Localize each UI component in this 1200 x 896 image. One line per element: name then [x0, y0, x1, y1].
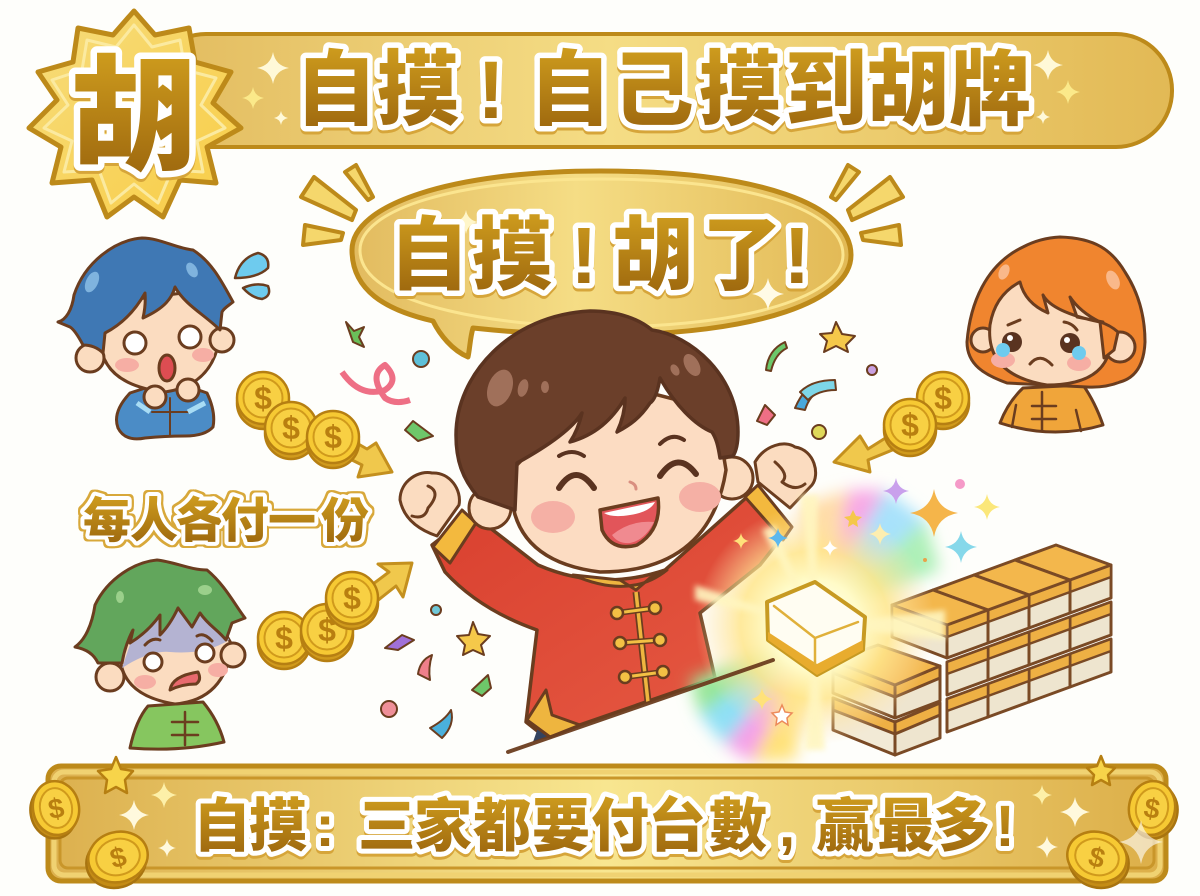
coins and arrow: green boy pays [258, 563, 412, 669]
character: blue boy surprised [58, 238, 234, 439]
blue boy eyes [124, 332, 146, 354]
boy leg [533, 722, 558, 742]
title banner [150, 34, 1172, 147]
corner star left [98, 757, 133, 793]
label: each pays one share: 每人各付一份 [83, 495, 369, 548]
girl tears and blush [991, 352, 1015, 368]
boy cuffs [433, 485, 792, 563]
girl right side lock [1100, 322, 1118, 358]
burst rays [301, 165, 903, 245]
green boy mouth [170, 672, 200, 690]
girl face [990, 282, 1107, 385]
confetti [342, 322, 877, 738]
glow sparkles [733, 478, 1000, 725]
character: main boy celebrating [400, 311, 816, 742]
title text: 自摸!自己摸到胡牌 [295, 45, 1031, 136]
coin [301, 604, 353, 661]
speech bubble [352, 171, 851, 357]
boy mouth [600, 498, 659, 547]
column 4 [1015, 545, 1111, 687]
boy cheeks [531, 501, 575, 533]
coin: $ [324, 419, 342, 455]
girl hair [967, 237, 1145, 387]
boy frogs [611, 602, 669, 683]
coins and arrow: blue boy pays [237, 372, 392, 477]
rainbow lower [690, 630, 815, 762]
badge: 胡 star [29, 11, 241, 217]
arrow [834, 432, 902, 472]
coins and arrow: girl pays [834, 372, 969, 472]
coin: $ [934, 380, 952, 416]
watermark sparkle [1119, 820, 1163, 864]
character: orange girl crying [967, 237, 1145, 432]
coin [307, 411, 359, 468]
rainbow upper [800, 490, 940, 620]
bubble sparkles [454, 210, 784, 310]
girl mouth [1030, 358, 1052, 365]
badge character: 胡 [72, 48, 196, 187]
banner sparkles [119, 782, 1090, 858]
coin [237, 372, 289, 429]
coin: $ [343, 580, 361, 616]
coin [326, 572, 378, 629]
slanted ground line [508, 660, 773, 752]
character: green boy worried [75, 560, 245, 749]
arrow [365, 563, 412, 605]
bottom banner [26, 756, 1182, 895]
boy eyes [559, 462, 696, 488]
boy hair [456, 311, 738, 510]
column 3 [974, 560, 1070, 702]
column 1 [892, 590, 988, 732]
green boy body [130, 702, 224, 749]
coin: $ [318, 612, 336, 648]
banner coin top left [26, 777, 84, 842]
banner coin bottom left: $ [107, 840, 130, 874]
coin: $ [901, 407, 919, 443]
banner coin bottom right: $ [1085, 840, 1109, 875]
boy nose [630, 482, 636, 489]
blue boy hair [58, 238, 233, 353]
banner coin bottom right [1060, 825, 1135, 895]
coin [258, 612, 310, 669]
title sparkles [242, 50, 1080, 125]
blue boy mouth [159, 355, 175, 381]
boy face [511, 380, 726, 572]
coin: $ [282, 410, 300, 446]
arrow [342, 438, 392, 477]
blue boy body [116, 380, 214, 439]
girl hair highlights [996, 263, 1123, 292]
girl eyes [1002, 332, 1022, 352]
boy hem trim [527, 690, 580, 737]
girl body [1000, 385, 1103, 432]
column 2 [933, 575, 1029, 717]
banner coin top right [1124, 777, 1182, 842]
girl ears [971, 328, 995, 352]
blue boy face [100, 290, 220, 392]
coin: $ [275, 620, 293, 656]
tile wall [833, 545, 1111, 755]
front stack [833, 645, 940, 755]
green boy eyes [144, 653, 162, 671]
banner coin top right: $ [1142, 792, 1163, 825]
glow core [695, 505, 935, 745]
corner star right [1087, 756, 1115, 785]
green boy shading [122, 605, 229, 668]
banner text: 自摸:三家都要付台數,贏最多! [193, 794, 1015, 859]
icon: sweat drops [235, 253, 269, 299]
glowing drawn tile [767, 582, 865, 675]
coin [265, 402, 317, 459]
boy fists [400, 444, 816, 536]
green boy hair [75, 560, 245, 663]
bubble text: 自摸!胡了! [389, 211, 810, 300]
boy robe [432, 497, 790, 737]
rainbow glow burst [690, 478, 1000, 762]
green boy face [120, 615, 232, 704]
banner coin bottom left [80, 825, 155, 895]
blue boy hands [144, 386, 166, 408]
boy button line [636, 592, 648, 702]
coin: $ [254, 380, 272, 416]
banner coin top left: $ [46, 792, 67, 825]
boy ears [469, 487, 511, 529]
boy collar [573, 570, 667, 590]
